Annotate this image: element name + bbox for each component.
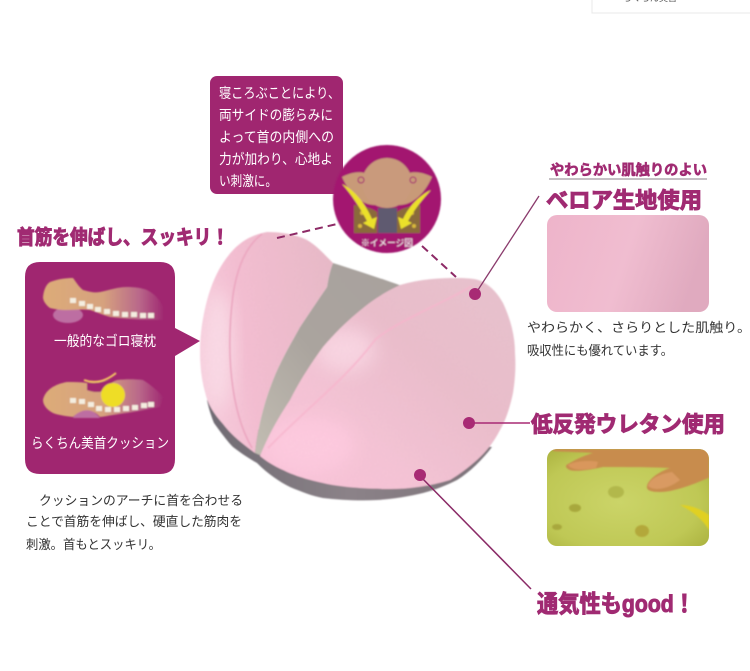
panel: pillow comparison — [25, 262, 200, 474]
heading: stretch neck: 首筋を伸ばし、スッキリ！ — [17, 226, 229, 249]
text: neck description: 刺激。首もとスッキリ。 — [26, 537, 161, 552]
right lobe seam — [268, 286, 472, 448]
label: ordinary pillow: 一般的なゴロ寝枕 — [54, 333, 156, 349]
grey centre fabric — [255, 263, 402, 456]
callout: inner neck text — [210, 76, 343, 194]
text: neck description: ことで首筋を伸ばし、硬直した筋肉を — [26, 514, 242, 529]
text: neck description — [26, 493, 243, 552]
callout: inner neck text: 力が加わり、心地よ — [219, 151, 333, 167]
text: velour description: 吸収性にも優れています。 — [527, 343, 673, 358]
left lobe — [200, 231, 334, 454]
cushion illustration — [195, 225, 520, 500]
right lobe — [255, 270, 520, 495]
label: cushion: らくちん美首クッション — [31, 435, 169, 451]
callout: inner neck text: よって首の内側への — [219, 129, 334, 145]
callout: inner neck text: 両サイドの膨らみに — [219, 107, 333, 123]
dashed connector lines — [277, 224, 456, 277]
swatch: velour fabric — [547, 215, 709, 312]
yellow arrows — [342, 184, 377, 229]
text: neck description: クッションのアーチに首を合わせる — [39, 493, 243, 508]
marker dots and leader lines — [414, 196, 539, 589]
photo: urethane foam and fingers — [547, 449, 709, 546]
diagram: ordinary pillow — [43, 278, 163, 323]
circle diagram: head on cushion — [333, 145, 441, 253]
top right tab — [592, 0, 750, 13]
cushion base — [207, 400, 492, 500]
callout: inner neck text: 寝ころぶことにより、 — [219, 85, 340, 101]
text: velour description: やわらかく、さらりとした肌触り。 — [527, 320, 750, 335]
heading: breathable: 通気性もgood！ — [537, 591, 695, 618]
spine bones — [70, 298, 154, 318]
heading: low rebound urethane: 低反発ウレタン使用 — [531, 412, 725, 437]
diagram: cushion neck — [43, 373, 163, 418]
circle diagram: head on cushion: ※イメージ図 — [361, 238, 413, 248]
heading: velour small: やわらかい肌触りのよい — [550, 162, 707, 179]
left lobe seam — [230, 234, 262, 448]
heading: velour: ベロア生地使用 — [546, 188, 702, 213]
callout: inner neck text: い刺激に。 — [219, 173, 277, 189]
text: velour description — [527, 320, 750, 358]
